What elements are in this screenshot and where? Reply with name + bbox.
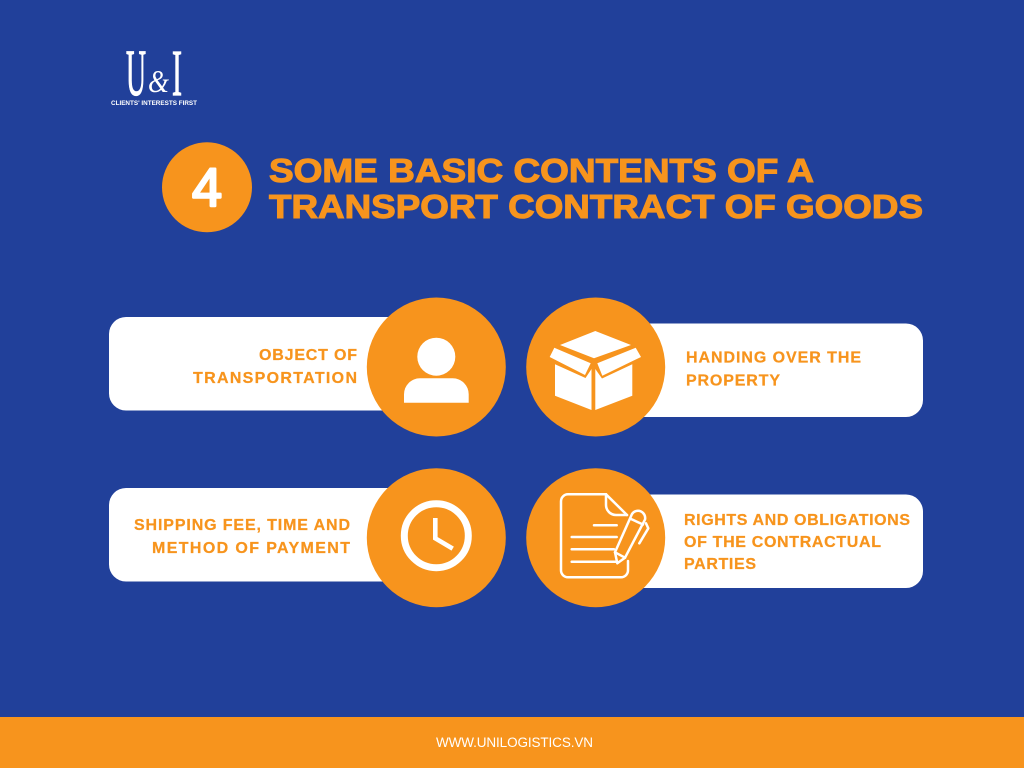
circle: person <box>367 298 506 436</box>
logo: U&I: & <box>148 63 169 99</box>
label: shipping fee, time and method of payment <box>134 517 350 557</box>
label: shipping fee, time and method of payment: SHIPPING FEE, TIME AND <box>134 517 350 534</box>
footer bar <box>0 717 1024 768</box>
footer website: WWW.UNILOGISTICS.VN <box>436 735 593 750</box>
logo: U&I: U <box>126 37 146 110</box>
icon: clock <box>404 504 468 568</box>
icon: open box <box>550 331 641 410</box>
panel: object of transportation <box>109 298 506 436</box>
label: rights and obligations of the contractual parties: OF THE CONTRACTUAL <box>684 534 881 551</box>
label: handing over the property <box>686 350 861 390</box>
icon: person <box>404 338 469 403</box>
label: rights and obligations of the contractual parties: RIGHTS AND OBLIGATIONS <box>684 512 910 529</box>
title: SOME BASIC CONTENTS OF A <box>269 153 814 190</box>
logo: U&I <box>111 37 197 110</box>
circle: box <box>526 298 665 436</box>
title: TRANSPORT CONTRACT OF GOODS <box>269 189 923 226</box>
label: object of transportation <box>193 347 357 387</box>
label: object of transportation: TRANSPORTATION <box>193 370 357 387</box>
label: rights and obligations of the contractual parties <box>684 512 910 573</box>
label: rights and obligations of the contractual parties: PARTIES <box>684 556 756 573</box>
panel: rights and obligations <box>526 468 923 607</box>
label: handing over the property: HANDING OVER THE <box>686 350 861 366</box>
label: shipping fee, time and method of payment: METHOD OF PAYMENT <box>152 540 350 557</box>
circle: clock <box>367 468 506 607</box>
logo: U&I: I <box>172 37 182 110</box>
icon: document and pen <box>561 494 648 577</box>
panel: shipping fee <box>109 468 506 607</box>
title <box>269 153 923 226</box>
logo: U&I: CLIENTS' INTERESTS FIRST <box>111 100 197 107</box>
number badge <box>162 142 252 232</box>
number badge: 4 <box>192 158 222 218</box>
label: object of transportation: OBJECT OF <box>259 347 357 364</box>
label: handing over the property: PROPERTY <box>686 372 780 390</box>
panel: handing over the property <box>526 298 923 436</box>
circle: document <box>526 468 665 607</box>
